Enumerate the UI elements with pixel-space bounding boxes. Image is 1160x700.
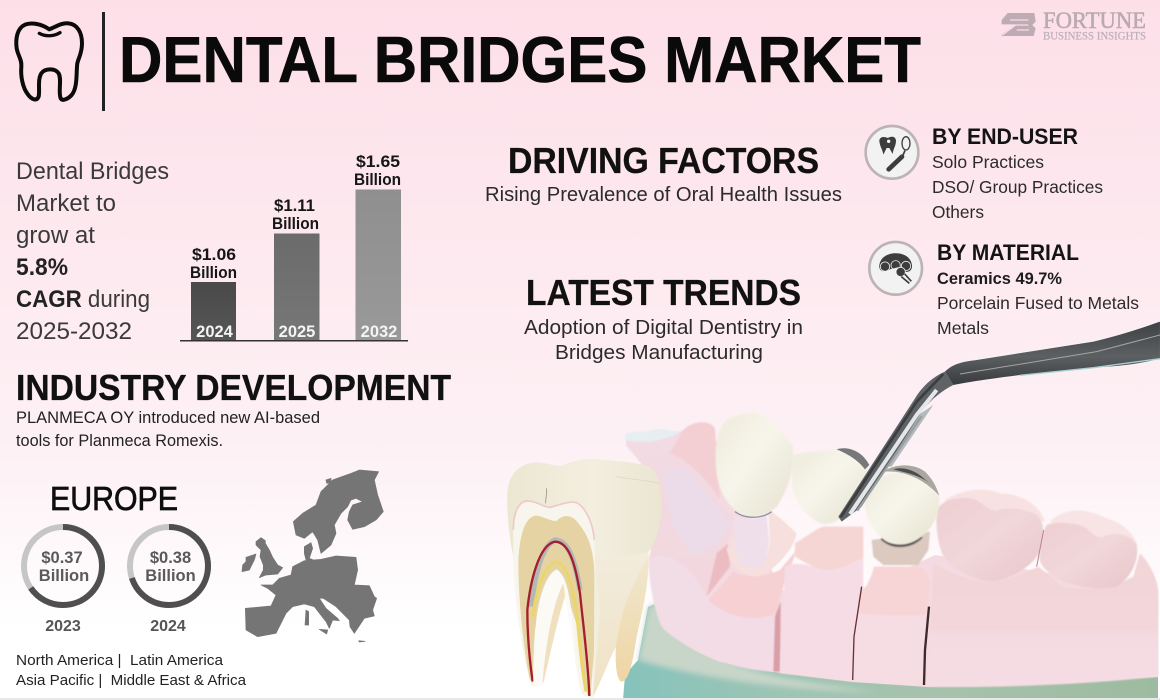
first die with stump bbox=[708, 510, 797, 672]
bridge crown two bbox=[792, 449, 868, 524]
illustration: dental tweezers bbox=[838, 321, 1160, 522]
crown one margin bbox=[735, 512, 772, 517]
second die bbox=[780, 527, 863, 682]
text: by material: Ceramics 49.7% bbox=[937, 270, 1062, 288]
donut chart: 2024: 2024 bbox=[150, 618, 186, 635]
heading: driving factors: Rising Prevalence of Oral Health Issues bbox=[485, 184, 842, 206]
back gum left bbox=[625, 422, 735, 660]
text: other regions: Asia Pacific | Middle East & Africa bbox=[16, 672, 247, 689]
text: by end-user: BY END-USER bbox=[932, 124, 1078, 149]
bar chart bbox=[180, 152, 408, 342]
crown three metal bbox=[883, 465, 939, 496]
icon: tooth and dental mirror bbox=[866, 126, 918, 179]
illustration: tooth cross-section bbox=[507, 459, 662, 698]
heading: latest trends: Bridges Manufacturing bbox=[555, 342, 763, 364]
illustration: dental model with bridge bbox=[623, 413, 1158, 700]
donut chart: 2023: 2023 bbox=[45, 618, 81, 635]
heading: latest trends: Adoption of Digital Dentistry in bbox=[524, 317, 803, 339]
text: by end-user: DSO/ Group Practices bbox=[932, 177, 1103, 197]
bar chart: Billion bbox=[354, 170, 401, 189]
model underlay bbox=[640, 440, 1158, 687]
bar chart: $1.65 bbox=[356, 152, 400, 171]
text: industry development: INDUSTRY DEVELOPMENT bbox=[16, 367, 451, 408]
bar chart: $1.06 bbox=[192, 245, 236, 264]
text: by end-user: Solo Practices bbox=[932, 152, 1044, 172]
bridge crown three bbox=[865, 473, 939, 544]
text: CAGR statement: 2025-2032 bbox=[16, 318, 132, 345]
die gaps bbox=[853, 530, 1044, 685]
heading: latest trends: LATEST TRENDS bbox=[526, 272, 801, 313]
text: CAGR statement: grow at bbox=[16, 222, 95, 249]
text: industry development bbox=[16, 367, 451, 450]
logo: Fortune Business Insights: BUSINESS INSIGHTS bbox=[1043, 30, 1146, 42]
text: industry development: tools for Planmeca Romexis. bbox=[16, 431, 223, 450]
icon: dental crowns bbox=[869, 242, 922, 295]
heading: latest trends bbox=[524, 272, 803, 364]
bar chart: 2032 bbox=[361, 323, 397, 341]
bottom edge line bbox=[0, 698, 1160, 700]
molar five bbox=[936, 498, 1043, 582]
bar chart: $1.11 bbox=[274, 196, 315, 215]
map of Europe bbox=[242, 470, 383, 642]
text: by end-user: Others bbox=[932, 202, 984, 222]
donut chart: 2024 bbox=[130, 527, 208, 635]
donut chart: 2023: $0.37 bbox=[41, 549, 83, 567]
heading: driving factors bbox=[485, 140, 842, 206]
text: by material bbox=[937, 240, 1139, 338]
text: by material: BY MATERIAL bbox=[937, 240, 1079, 265]
heading: Europe: EUROPE bbox=[50, 480, 178, 517]
text: by material: Metals bbox=[937, 318, 989, 338]
title: DENTAL BRIDGES MARKET bbox=[119, 23, 921, 96]
model base bbox=[623, 600, 1158, 700]
abutment die bbox=[857, 532, 930, 685]
text: CAGR statement: CAGR during bbox=[16, 286, 150, 313]
text: CAGR statement bbox=[16, 158, 169, 345]
bar chart: Billion bbox=[190, 263, 237, 282]
text: industry development: PLANMECA OY introduced new AI-based bbox=[16, 408, 320, 427]
title divider bbox=[102, 12, 105, 111]
logo: Fortune Business Insights: FORTUNE bbox=[1043, 8, 1146, 33]
text: by material: Porcelain Fused to Metals bbox=[937, 293, 1139, 313]
bar chart: Billion bbox=[272, 214, 319, 233]
text: by end-user bbox=[932, 124, 1103, 222]
donut chart: 2024: Billion bbox=[145, 567, 196, 585]
bar chart: 2024 bbox=[196, 323, 234, 341]
donut chart: 2023: Billion bbox=[39, 567, 89, 585]
donut chart: 2023 bbox=[24, 527, 102, 635]
crown two metal bbox=[837, 448, 869, 469]
text: CAGR statement: Market to bbox=[16, 190, 116, 217]
icon: tooth outline bbox=[16, 23, 82, 100]
text: other regions: North America | Latin America bbox=[16, 652, 224, 669]
bar chart: 2025 bbox=[279, 323, 315, 341]
text: other regions bbox=[16, 652, 247, 689]
bridge crown one bbox=[716, 413, 793, 517]
crown three metal shadow bbox=[893, 468, 928, 483]
donut chart: 2024: $0.38 bbox=[150, 549, 191, 567]
logo: Fortune Business Insights bbox=[1002, 8, 1146, 42]
heading: driving factors: DRIVING FACTORS bbox=[508, 140, 819, 181]
text: CAGR statement: 5.8% bbox=[16, 254, 68, 281]
molar six bbox=[1039, 523, 1137, 588]
right gum block bbox=[927, 490, 1158, 687]
text: CAGR statement: Dental Bridges bbox=[16, 158, 169, 185]
